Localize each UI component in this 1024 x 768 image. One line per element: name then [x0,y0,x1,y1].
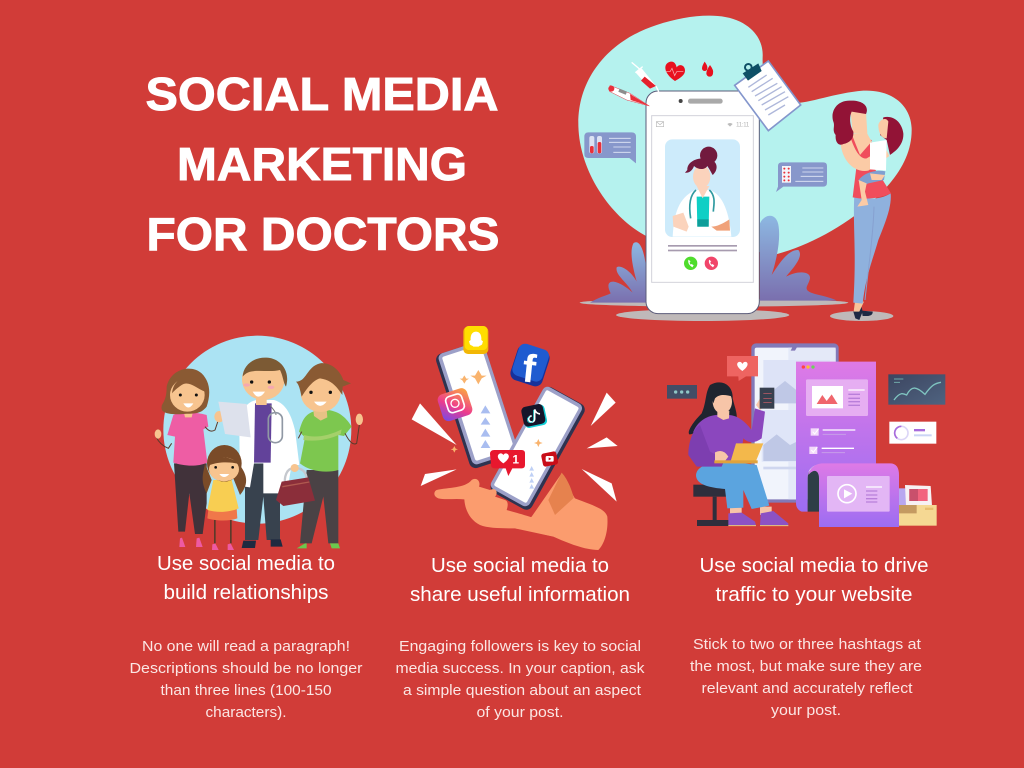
column 2 heading: Use social media to [431,555,609,577]
doctor card [665,139,740,237]
chart card [888,374,945,405]
column 2 heading: share useful information [410,584,630,606]
illustration: doctor on phone with mother and child: 11:11 [736,122,750,129]
column 2 body: media success. In your caption, ask [396,660,645,677]
column 3 heading [700,555,928,606]
teal blob background [578,16,912,254]
heart bubble [727,356,758,381]
purple web page [796,362,876,512]
icon: like bubble [490,450,525,476]
phone [646,91,759,314]
father [296,363,363,548]
illustration: family with doctor [155,336,363,550]
woman sitting with laptop [688,382,788,526]
shards [412,393,618,502]
hand fingers [434,479,555,537]
column 2 body [396,638,645,721]
icon: tiktok [520,403,548,429]
column 1 body: No one will read a paragraph! [142,638,350,655]
stool [693,485,730,526]
illustration: woman with website screens [667,343,945,527]
column 2 heading [410,555,630,606]
column 1 body: than three lines (100-150 [160,682,332,699]
speech bubble: test tubes [584,132,636,163]
column 1 heading: build relationships [164,582,328,604]
title: SOCIAL MEDIA [146,68,498,120]
blue circle [163,336,351,524]
icon: youtube [541,451,559,467]
column 1 heading: Use social media to [157,553,335,575]
column 3 body: your post. [771,702,841,719]
column 3 body: the most, but make sure they are [690,658,922,675]
column 2 body: of your post. [476,704,564,721]
column 3 heading: traffic to your website [716,584,912,606]
illustration: doctor on phone with mother and child [578,16,912,321]
plants [590,216,837,303]
bag [276,464,315,506]
doctor [218,358,299,548]
column 2 body: Engaging followers is key to social [399,638,641,655]
thermometer [608,85,649,106]
name lines [668,245,737,247]
phone screen [652,116,753,282]
daughter [203,445,246,550]
donut card [889,422,936,444]
icon: like bubble: 1 [512,452,519,466]
syringe [632,62,659,92]
column 1 body [130,638,363,721]
clipboard [735,61,801,131]
dots bubble [667,385,697,399]
left phone [434,340,519,470]
heart icon [665,62,685,81]
title: MARKETING [177,138,467,190]
hand back [515,473,608,550]
title: FOR DOCTORS [146,208,500,260]
rolled video panel [808,463,899,527]
column 2 body: a simple question about an aspect [403,682,642,699]
column 1 body: characters). [206,704,286,721]
column 1 heading [157,553,335,604]
icon: instagram [436,387,474,423]
tablet [751,343,839,503]
mother [155,369,224,547]
doctor [673,147,731,237]
column 3 body: Stick to two or three hashtags at [693,636,922,653]
illustration: phones in hand with social icons [412,326,618,550]
icon: facebook [508,342,552,392]
small sparkle [451,446,458,453]
right phone [488,385,587,512]
column 3 heading: Use social media to drive [700,555,928,577]
mother and child [832,101,903,320]
ground shadows [580,299,893,321]
icon: snapchat [463,326,488,354]
title [146,68,500,260]
blood drops [702,62,713,77]
icon: facebook: f [520,346,539,392]
box and photos [899,485,937,526]
call buttons [684,257,697,270]
speech bubble: pills [776,162,827,192]
column 1 body: Descriptions should be no longer [130,660,363,677]
column 3 body: relevant and accurately reflect [702,680,913,697]
column 3 body [690,636,922,719]
